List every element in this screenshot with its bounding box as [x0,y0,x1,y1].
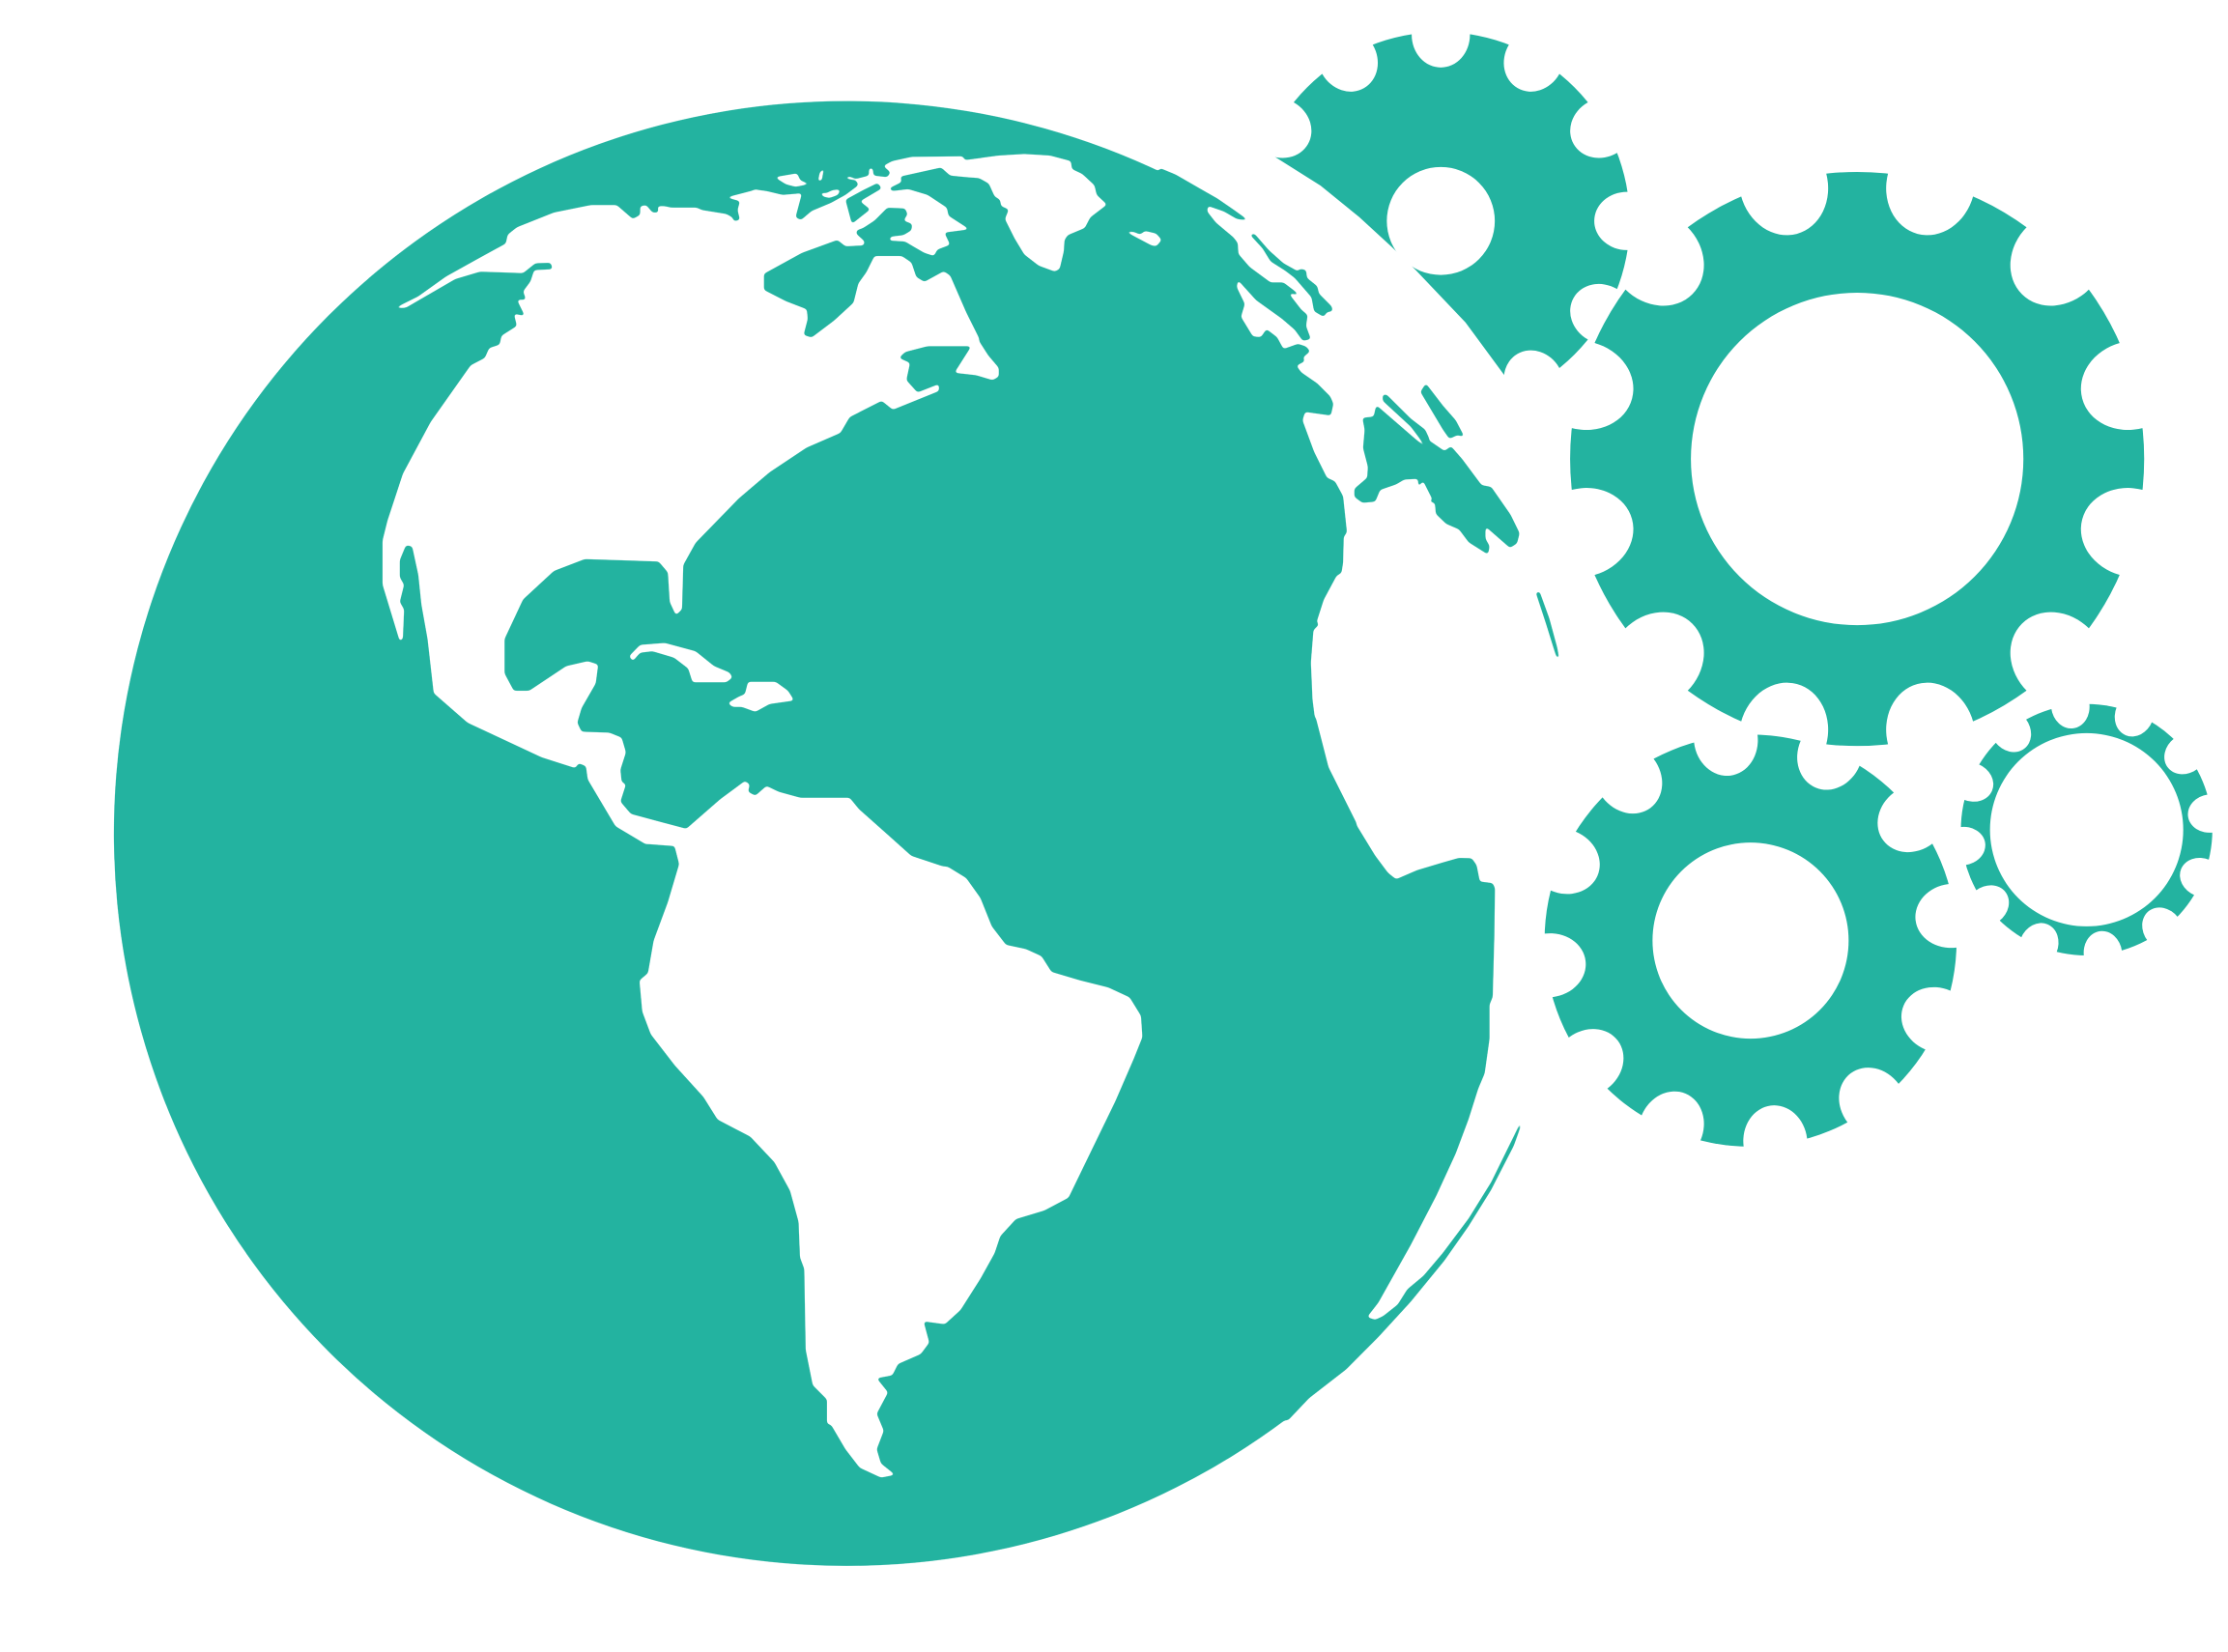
globe ocean body [114,101,1521,1566]
island: Madagascar sliver [1535,591,1559,660]
icon: large gear [1570,172,2145,746]
icon: top gear [1159,2,1660,515]
island: narrow strip [1383,394,1429,449]
land: South America [640,825,1142,1478]
island: Southeast Asia main [1355,406,1520,555]
land: Iceland [1124,231,1161,246]
island: Japan sliver [1249,234,1332,317]
icon: small gear [1937,681,2228,979]
land: Cuba [629,642,732,682]
land: Hispaniola [728,682,794,712]
land: North America west and south [383,189,999,886]
land: Arctic island shard [775,167,825,186]
land: Arctic island blob [819,189,841,198]
land: Arctic Canada and Greenland [754,154,1107,346]
channel: Arctic sea arm [845,183,882,224]
island: upper strip [1420,384,1465,439]
icon: medium gear [1544,734,1957,1147]
globe [114,101,1559,1566]
